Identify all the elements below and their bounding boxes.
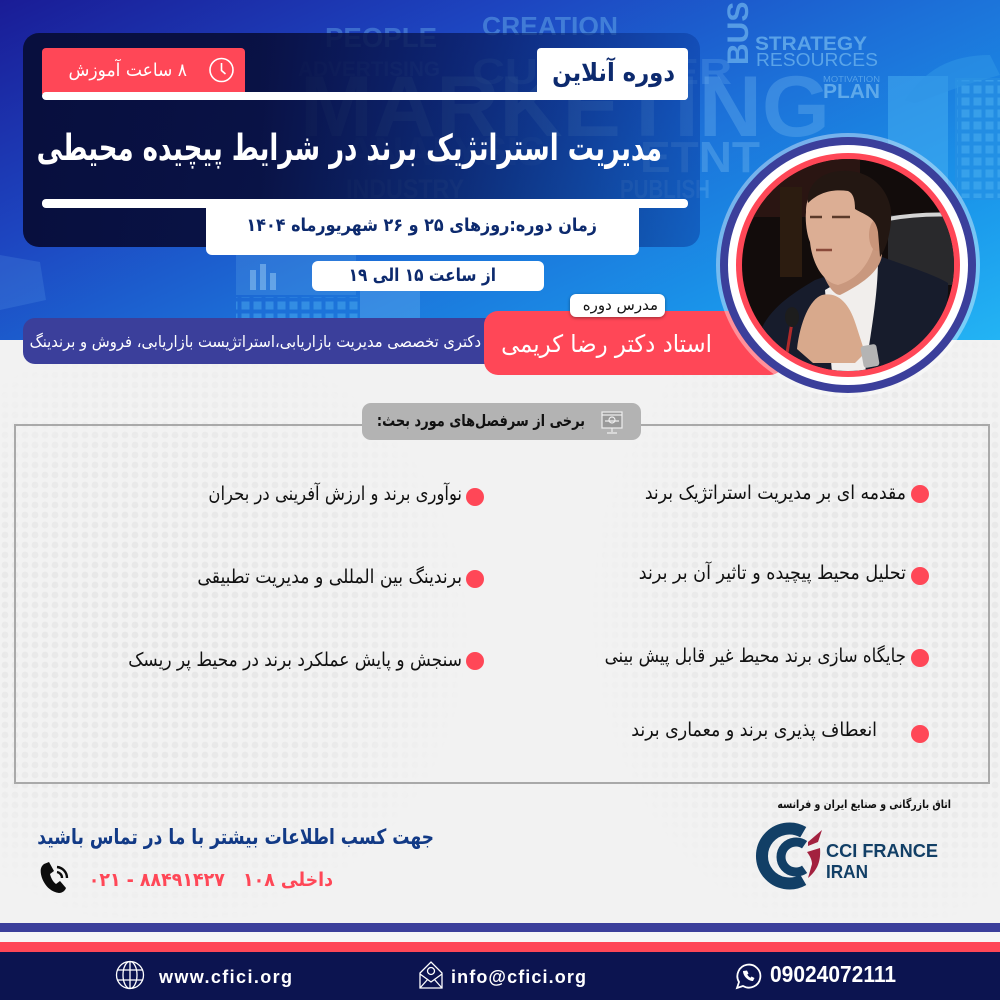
online course text: دوره آنلاین — [552, 58, 675, 87]
icon: whatsapp — [736, 964, 762, 990]
topics frame — [14, 424, 990, 784]
halftone dot background — [2, 416, 998, 806]
topic text: مقدمه ای بر مدیریت استراتژیک برند — [645, 482, 906, 504]
portrait — [716, 133, 980, 393]
phone number: 09024072111 — [770, 961, 896, 987]
topic: innovation — [208, 482, 484, 506]
icon: email — [419, 961, 443, 989]
laptop illustration — [236, 255, 420, 320]
shirt — [825, 259, 878, 373]
duration text: ۸ ساعت آموزش — [69, 60, 187, 81]
marketing word cloud background: ADVERTISING — [298, 58, 440, 81]
icon: phone — [40, 862, 68, 893]
duration badge — [42, 48, 245, 94]
icon: clock — [209, 58, 234, 82]
marketing word cloud background: CREATION — [482, 11, 618, 41]
topic: intro — [645, 482, 929, 504]
time box — [312, 261, 544, 291]
instructor name box — [484, 311, 784, 375]
marketing word cloud background: INDUSTRY — [346, 174, 464, 204]
marketing word cloud background: RESOURCES — [756, 50, 878, 70]
topic bullet — [466, 488, 484, 506]
footer bar — [0, 952, 1000, 1000]
marketing word cloud background: MARKETING — [300, 59, 830, 155]
marketing word cloud background: ETNT — [640, 133, 760, 182]
topic bullet — [466, 652, 484, 670]
marketing word cloud background: PLAN — [823, 81, 880, 103]
topic text: انعطاف پذیری برند و معماری برند — [631, 719, 877, 741]
marketing word cloud background: MOTIVATION — [823, 75, 880, 84]
suit — [762, 257, 948, 371]
date box — [206, 208, 639, 255]
topic text: تحلیل محیط پیچیده و تاثیر آن بر برند — [639, 562, 906, 584]
paper and keyboard illustration — [888, 55, 1000, 340]
tricolor stripes — [0, 923, 1000, 952]
topic bullet — [911, 567, 929, 585]
topic: flexibility — [631, 719, 929, 743]
topic: measurement — [128, 649, 484, 671]
topic text: نوآوری برند و ارزش آفرینی در بحران — [208, 483, 462, 505]
website: www.cfici.org — [158, 967, 292, 987]
chip text: مدرس دوره — [583, 296, 658, 314]
contact phone: داخلی ۱۰۸ ۸۸۴۹۱۴۲۷ - ۰۲۱ — [89, 869, 333, 891]
topic bullet — [911, 725, 929, 743]
credentials text: دکتری تخصصی مدیریت بازاریابی،استراتژیست بازاریابی، فروش و برندینگ — [30, 332, 481, 351]
date text: زمان دوره:روزهای ۲۵ و ۲۶ شهریورماه ۱۴۰۴ — [246, 215, 597, 236]
logo: CCI France Iran — [756, 822, 938, 890]
title: مدیریت استراتژیک برند در شرایط پیچیده محیطی — [37, 128, 662, 169]
time text: از ساعت ۱۵ الی ۱۹ — [349, 265, 496, 286]
icon: presentation screen — [601, 411, 623, 434]
topic text: جایگاه سازی برند محیط غیر قابل پیش بینی — [605, 645, 906, 667]
marketing word cloud background: BUS — [722, 2, 755, 65]
neck and face — [824, 249, 882, 295]
hands — [797, 294, 865, 363]
topic: positioning — [605, 645, 929, 667]
microphone — [787, 322, 792, 353]
icon: globe — [116, 960, 144, 990]
marketing word cloud background: CUSTOMER — [472, 51, 732, 92]
online course label — [537, 48, 688, 100]
left edge hand — [0, 255, 46, 310]
logo: CCI France Iran: IRAN — [826, 862, 868, 882]
marketing word cloud background: PUBLISH — [620, 174, 710, 204]
topic bullet — [911, 485, 929, 503]
topic text: برندینگ بین المللی و مدیریت تطبیقی — [197, 566, 462, 588]
chamber name: اتاق بازرگانی و صنایع ایران و فرانسه — [777, 797, 951, 811]
instructor chip — [570, 294, 665, 317]
marketing word cloud background: STRATEGY — [755, 34, 867, 55]
top banner background — [0, 0, 1000, 340]
topics heading label — [362, 403, 641, 440]
topic: international — [197, 566, 484, 588]
logo: CCI France Iran: CCI FRANCE — [826, 841, 938, 861]
topic bullet — [466, 570, 484, 588]
top white rule — [42, 92, 688, 100]
hair — [808, 171, 891, 257]
topic: complex environment — [639, 561, 929, 585]
dark title panel — [23, 33, 700, 247]
ear — [869, 221, 878, 248]
instructor credentials bar — [23, 318, 503, 364]
topics heading text: برخی از سرفصل‌های مورد بحث: — [377, 411, 585, 430]
email address: info@cfici.org — [451, 967, 586, 987]
marketing word cloud background: ANALYSIS — [345, 130, 545, 174]
marketing word cloud background: PEOPLE — [325, 22, 437, 53]
topic bullet — [911, 649, 929, 667]
instructor name: استاد دکتر رضا کریمی — [501, 330, 712, 358]
marketing word cloud background — [0, 2, 1000, 318]
contact heading: جهت کسب اطلاعات بیشتر با ما در تماس باشید — [37, 825, 434, 849]
chair — [888, 215, 958, 285]
lower white rule — [42, 199, 688, 208]
topic text: سنجش و پایش عملکرد برند در محیط پر ریسک — [128, 649, 462, 671]
eyes and mouth — [810, 216, 850, 218]
